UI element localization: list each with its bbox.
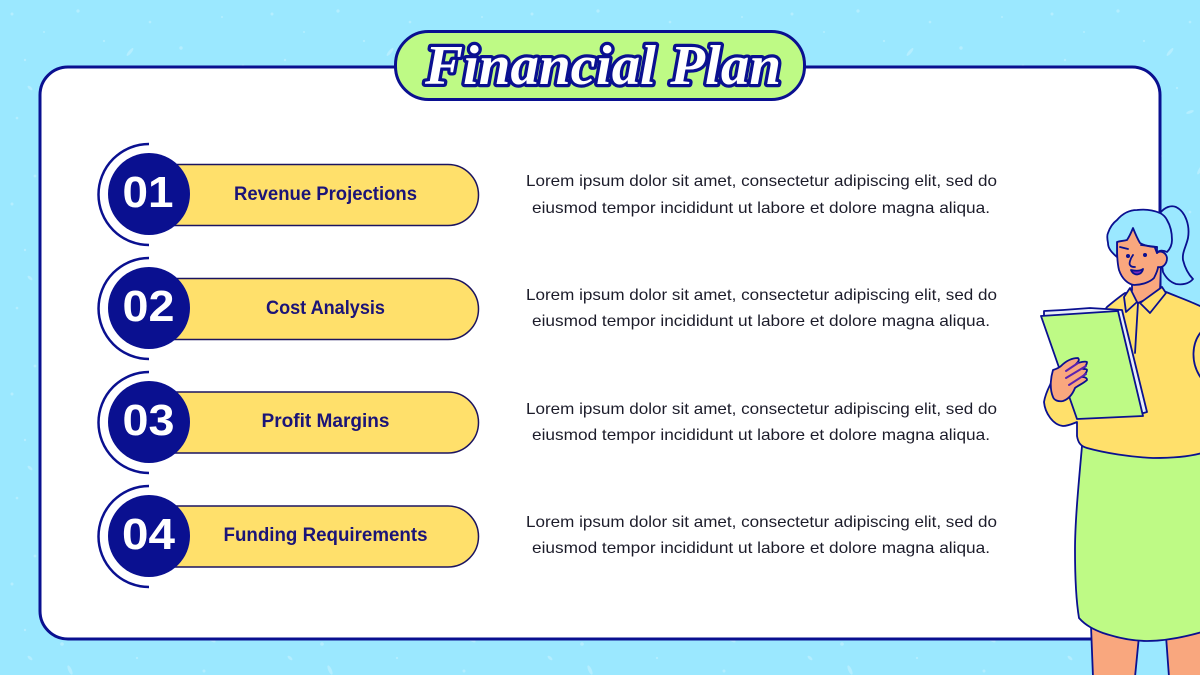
- title badge: [396, 32, 804, 100]
- number circle 2: [108, 267, 190, 349]
- label pill 1: [140, 164, 478, 226]
- clipboard back: [1044, 308, 1147, 414]
- hand: [1051, 358, 1087, 401]
- description 4: Lorem ipsum dolor sit amet, consectetur adipiscing elit, sed do: [526, 514, 997, 531]
- eyes, brows, nose and mouth: [1120, 245, 1157, 274]
- number circle 3: [108, 381, 190, 463]
- number 3: 03: [122, 396, 174, 445]
- clipboard sheet: [1041, 311, 1143, 419]
- description 3: Lorem ipsum dolor sit amet, consectetur adipiscing elit, sed do: [526, 401, 997, 418]
- title: Financial Plan: [424, 35, 781, 97]
- arc 1: [98, 144, 149, 245]
- label 1: Revenue Projections: [234, 184, 417, 205]
- label pill 3: [140, 392, 478, 453]
- sweater: [1044, 292, 1200, 458]
- description 3: [526, 401, 997, 444]
- label 3: Profit Margins: [262, 411, 390, 432]
- label 2: Cost Analysis: [266, 298, 385, 319]
- placket: [1135, 303, 1138, 353]
- description 2: Lorem ipsum dolor sit amet, consectetur adipiscing elit, sed do: [526, 287, 997, 304]
- skirt: [1075, 446, 1200, 641]
- finger lines: [1066, 363, 1086, 385]
- legs: [1091, 626, 1200, 675]
- description 3: eiusmod tempor incididunt ut labore et dolore magna aliqua.: [532, 427, 990, 444]
- hair: [1107, 210, 1172, 257]
- neck: [1130, 265, 1161, 303]
- number circle 4: [108, 495, 190, 577]
- white main panel: [40, 67, 1160, 639]
- ponytail: [1160, 206, 1193, 284]
- arc 3: [98, 372, 149, 473]
- collar: [1124, 287, 1166, 313]
- description 4: [526, 514, 997, 557]
- number circle 1: [108, 153, 190, 235]
- illustration: woman with clipboard: [1041, 206, 1200, 675]
- face: [1117, 228, 1167, 285]
- label pill 4: [140, 506, 478, 567]
- label 4: Funding Requirements: [224, 525, 428, 546]
- number 2: 02: [122, 282, 174, 331]
- number 4: 04: [122, 510, 176, 559]
- sleeve fold: [1193, 332, 1200, 378]
- label pill 2: [140, 278, 478, 340]
- description 4: eiusmod tempor incididunt ut labore et dolore magna aliqua.: [532, 540, 990, 557]
- row 4: Funding Requirements: [98, 486, 478, 587]
- description 1: eiusmod tempor incididunt ut labore et dolore magna aliqua.: [532, 200, 990, 217]
- row 3: Profit Margins: [98, 372, 478, 473]
- row 1: Revenue Projections: [98, 144, 478, 245]
- description 1: [526, 173, 997, 217]
- description 2: [526, 287, 997, 330]
- description 1: Lorem ipsum dolor sit amet, consectetur adipiscing elit, sed do: [526, 173, 997, 190]
- arc 2: [99, 258, 149, 359]
- number 1: 01: [122, 168, 174, 217]
- arc 4: [98, 486, 149, 587]
- row 2: Cost Analysis: [99, 258, 479, 359]
- description 2: eiusmod tempor incididunt ut labore et dolore magna aliqua.: [532, 313, 990, 330]
